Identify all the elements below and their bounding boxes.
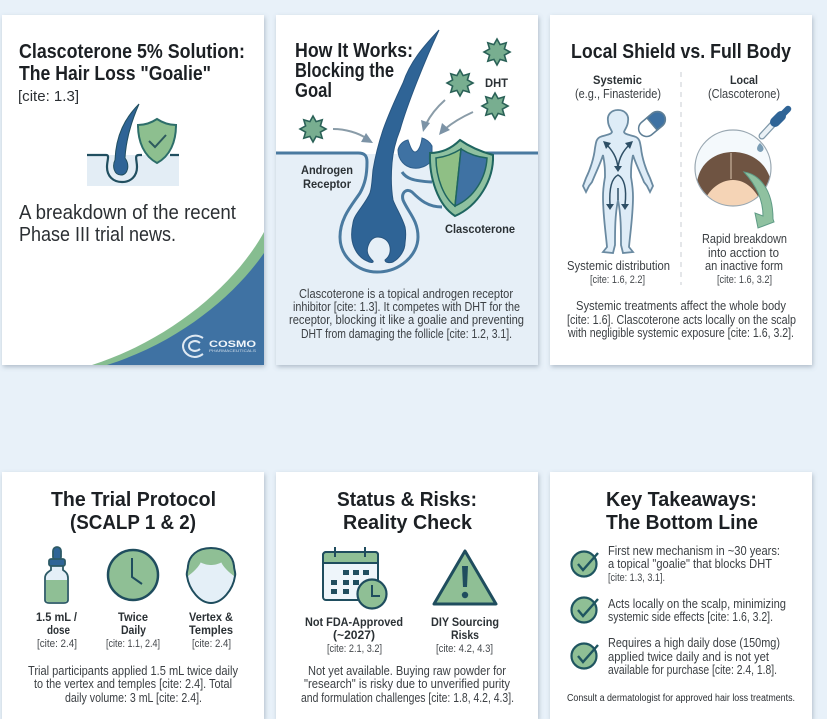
label: frequency: Daily [121,623,146,637]
column head: local: Local [730,73,758,87]
text: local caption: into acction to [708,246,779,260]
panel: key takeaways [550,472,812,719]
label: DIY risks: DIY Sourcing [431,615,499,629]
icon: pill [635,108,669,140]
icon: head with treatment zones [186,546,236,603]
heading: Status & Risks: [337,489,477,511]
heading: Local Shield vs. Full Body [571,41,792,63]
label: FDA status [305,615,403,655]
panel: status and risks [276,472,538,719]
panel: local vs systemic [550,15,812,365]
icon: check 3 [572,644,598,668]
text: mechanism description: inhibitor [cite: 1.3]. It competes with DHT for the [293,300,520,314]
text: protocol description [28,664,239,705]
heading: The Trial Protocol [51,489,216,511]
heading: how it works: Blocking the [295,60,394,82]
heading [337,489,477,534]
heading: how it works: Goal [295,80,332,102]
corner swoosh [92,232,264,365]
icon: androgen receptor [398,138,432,168]
label: frequency [106,610,160,650]
text: mechanism description: DHT from damaging the follicle [cite: 1.2, 3.1]. [301,327,512,341]
text: comparison description: [cite: 1.6]. Clascoterone acts locally on the scalp [567,313,796,327]
heading: title: The Hair Loss "Goalie" [19,63,211,85]
icon: human body [583,110,653,253]
label: dose: [cite: 2.4] [37,638,77,650]
heading [606,489,758,534]
text: takeaway 2: Acts locally on the scalp, minimizing [608,597,786,611]
text: protocol description: Trial participants applied 1.5 mL twice daily [28,664,239,678]
heading: how it works: How It Works: [295,40,413,62]
text: systemic caption: Systemic distribution [567,259,670,273]
heading: Reality Check [343,512,473,534]
text: mechanism description: receptor, blocking it like a goalie and preventing [289,313,524,327]
label: androgen receptor [301,163,353,191]
label: DHT: DHT [485,76,509,90]
citation: [cite: 1.3] [18,88,79,105]
icon: check 2 [572,598,598,622]
icon: dropper bottle [45,547,68,603]
diagram: follicle outline [276,153,538,272]
icon: warning triangle [434,551,496,604]
text: takeaway 3: applied twice daily and is not yet [608,650,769,664]
label: DIY risks: Risks [451,628,479,642]
label: area [189,610,233,650]
label: DIY risks: [cite: 4.2, 4.3] [436,643,493,655]
text: takeaway 1: a topical "goalie" that blocks DHT [608,557,772,571]
text: takeaway 2: systemic side effects [cite: 1.6, 3.2]. [608,610,773,624]
text: takeaway 3 [608,636,780,677]
text: local caption: [cite: 1.6, 3.2] [717,274,772,286]
text: systemic caption: [cite: 1.6, 2.2] [590,274,645,286]
label: dose [36,610,78,650]
skin background [276,154,538,365]
column head: local [708,73,780,101]
logo: Cosmo [183,336,257,357]
text: comparison description [567,299,796,340]
label: FDA status: Not FDA-Approved [305,615,403,629]
icon: clock [108,550,158,600]
label: area: Vertex & [189,610,233,624]
icon: dropper [757,109,788,152]
icon: DHT molecules [300,39,510,142]
label: dose: 1.5 mL / [36,610,78,624]
icon: calendar with clock [323,547,386,608]
text: takeaway 1: First new mechanism in ~30 years: [608,544,780,558]
heading: title [19,41,245,85]
column head: systemic: Systemic [593,73,642,87]
text: systemic caption [567,259,670,286]
label: DIY risks [431,615,499,655]
diagram: hair shaft [352,30,439,263]
heading: title: Clascoterone 5% Solution: [19,41,245,63]
text: subtitle: A breakdown of the recent [19,202,236,224]
icon: scalp circle [695,130,771,210]
text: takeaway 3: Requires a high daily dose (150mg) [608,636,780,650]
heading: how it works [295,40,413,102]
label: frequency: Twice [118,610,148,624]
text: local caption: an inactive form [705,259,783,273]
arrows: DHT toward receptor [333,100,473,143]
label: dose: dose [47,623,70,637]
text: comparison description: Systemic treatments affect the whole body [576,299,787,313]
column head: systemic [575,73,661,101]
text: risks description: Not yet available. Buying raw powder for [308,664,506,678]
panel: how it works [276,15,538,365]
text: takeaway 1 [608,544,780,584]
text: mechanism description: Clascoterone is a topical androgen receptor [299,287,513,301]
heading [51,489,216,534]
panel: trial protocol [2,472,264,719]
text: risks description: and formulation challenges [cite: 1.8, 4.2, 4.3]. [301,691,514,705]
heading: Key Takeaways: [606,489,757,511]
arrow: breakdown [744,172,774,228]
heading: (SCALP 1 & 2) [70,512,196,534]
icon: follicle and shield [87,104,179,186]
text: takeaway 2 [608,597,786,624]
label: clascoterone: Clascoterone [445,222,515,236]
text: risks description: "research" is risky due to unverified purity [304,677,511,691]
text: risks description [301,664,514,705]
label: area: Temples [189,623,233,637]
label: frequency: [cite: 1.1, 2.4] [106,638,160,650]
column head: systemic: (e.g., Finasteride) [575,87,661,101]
icon: check 1 [572,552,598,576]
label: area: [cite: 2.4] [192,638,231,650]
logo: Cosmo: COSMO [209,339,256,350]
text: takeaway 1: [cite: 1.3, 3.1]. [608,572,665,584]
label: androgen receptor: Receptor [303,177,351,191]
icon: clascoterone shield [430,140,493,216]
label: androgen receptor: Androgen [301,163,353,177]
text: subtitle: Phase III trial news. [19,224,176,246]
text: protocol description: to the vertex and temples [cite: 2.4]. Total [34,677,232,691]
text: protocol description: daily volume: 3 mL [cite: 2.4]. [65,691,202,705]
text: disclaimer: Consult a dermatologist for approved hair loss treatments. [567,693,795,704]
label: FDA status: (~2027) [333,628,375,642]
heading: The Bottom Line [606,512,758,534]
panel: title card [2,15,264,365]
logo: Cosmo: PHARMACEUTICALS [209,349,257,353]
text: takeaway 3: available for purchase [cite: 2.4, 1.8]. [608,663,777,677]
text: local caption: Rapid breakdown [702,232,787,246]
label: FDA status: [cite: 2.1, 3.2] [327,643,382,655]
text: subtitle [19,202,236,246]
text: local caption [702,232,787,286]
text: mechanism description [289,287,524,341]
column head: local: (Clascoterone) [708,87,780,101]
